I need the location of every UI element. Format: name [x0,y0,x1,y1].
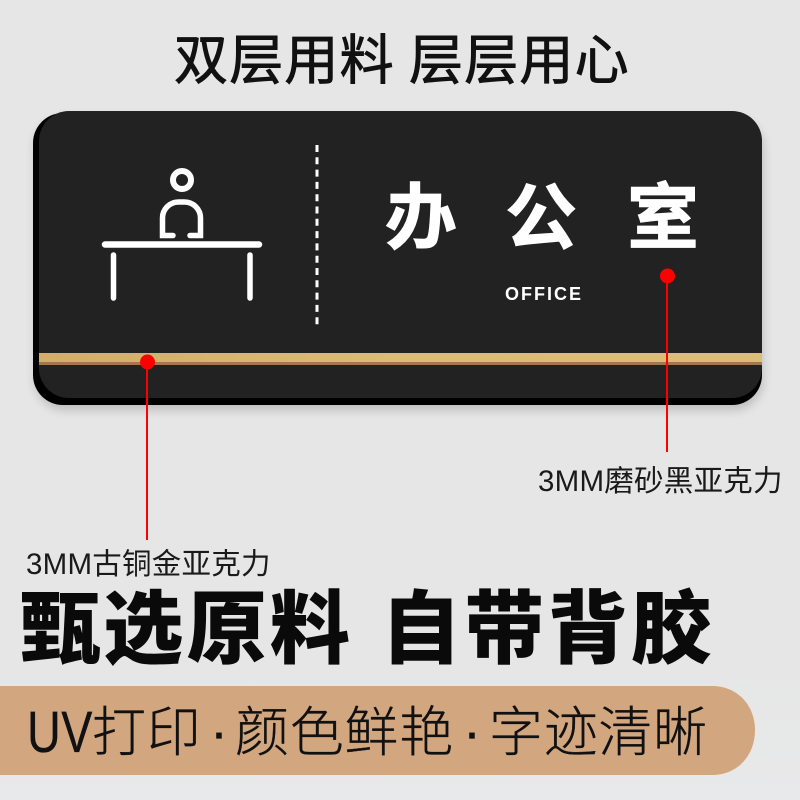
callout: black acrylic pointer [660,268,675,452]
title: 双层用料 [174,31,395,91]
sign text: office chinese: 办 [385,179,457,259]
sign text: OFFICE: OFFICE [505,284,581,304]
banner [0,686,755,775]
banner text: · [210,702,229,762]
banner text: 颜色鲜艳 [235,703,454,763]
banner text [27,700,708,765]
divider dashed line [316,145,318,325]
callout: gold acrylic pointer [140,354,155,540]
sign text: office chinese: 公 [505,179,577,259]
icon: person at desk [105,171,259,298]
sign text: office chinese: 室 [627,179,699,259]
banner text: UV [27,700,93,765]
banner text: 打印 [92,703,201,763]
title: 层层用心 [409,31,630,91]
gold stripe [39,353,762,365]
panel: sign plate [33,111,763,410]
headline: 甄选原料 [20,585,353,674]
sign text: office chinese [385,179,699,259]
headline: 自带背胶 [381,585,714,674]
banner text: · [463,702,482,762]
banner text: 字迹清晰 [489,703,708,763]
callout label: gold acrylic: 3MM古铜金亚克力 [26,548,271,581]
callout label: black acrylic: 3MM磨砂黑亚克力 [538,465,783,498]
